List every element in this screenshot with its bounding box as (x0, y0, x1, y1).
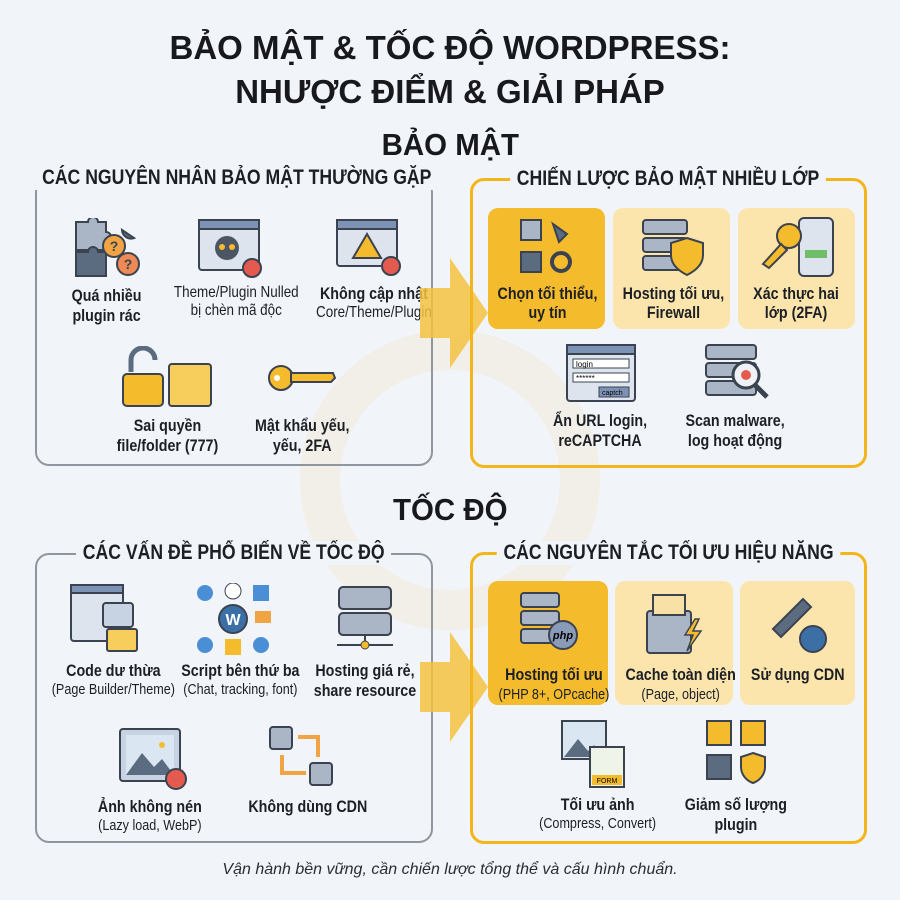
section heading: tốc độ: TỐC ĐỘ (393, 492, 507, 527)
item: nulled theme: Theme/Plugin Nulled (174, 284, 299, 301)
item: reduce plugins: Giảm số lượng (684, 795, 787, 814)
item: not updated (316, 219, 432, 321)
item: scan malware: log hoạt động (688, 431, 783, 450)
panel title: CHIẾN LƯỢC BẢO MẬT NHIỀU LỚP (517, 167, 820, 190)
tile: minimal plugins: Chọn tối thiểu, (498, 284, 597, 303)
tile: 2FA (738, 208, 855, 329)
tile: optimized hosting (488, 581, 608, 705)
arrow: security (420, 258, 488, 368)
item: weak password (255, 365, 349, 455)
item: hide login (553, 344, 648, 450)
tile: cache: (Page, object) (641, 686, 720, 703)
item: weak password: yếu, 2FA (273, 436, 331, 455)
item: hide login: Ẩn URL login, (553, 411, 648, 430)
item: image optimization: (Compress, Convert) (539, 815, 656, 832)
panel: security causes (35, 178, 433, 466)
item: no CDN (248, 726, 367, 816)
panel: security strategy (470, 178, 867, 468)
tile: optimized hosting: (PHP 8+, OPcache) (499, 686, 609, 703)
title (170, 29, 730, 110)
item: wrong permissions: Sai quyền (133, 416, 201, 435)
item: reduce plugins: plugin (714, 815, 757, 834)
item: hide login: login (576, 360, 592, 369)
item: hide login: reCAPTCHA (559, 431, 642, 450)
item: uncompressed image: Ảnh không nén (98, 797, 201, 816)
watermark (300, 330, 600, 630)
item: uncompressed image (98, 728, 201, 834)
item: not updated: Không cập nhật (320, 284, 428, 303)
item: redundant code: Code dư thừa (66, 661, 161, 680)
item: hide login: ****** (576, 374, 594, 383)
item: cheap hosting: share resource (314, 681, 416, 700)
tile: CDN (740, 581, 855, 705)
item: hide login: captch (602, 390, 622, 397)
item: third-party scripts: (Chat, tracking, font) (183, 681, 297, 698)
panel title: CÁC VẤN ĐỀ PHỔ BIẾN VỀ TỐC ĐỘ (83, 541, 385, 564)
item: weak password: Mật khẩu yếu, (255, 416, 349, 435)
item: redundant code: (Page Builder/Theme) (52, 681, 175, 698)
panel title: CÁC NGUYÊN TẮC TỐI ƯU HIỆU NĂNG (503, 541, 834, 564)
item: wrong permissions (116, 346, 218, 455)
item: too many plugins: plugin rác (73, 306, 141, 325)
tile: hosting firewall: Hosting tối ưu, (623, 284, 724, 303)
tile: minimal plugins: uy tín (528, 303, 567, 322)
tile: cache (615, 581, 733, 705)
footer text: Vận hành bền vững, cần chiến lược tổng thể và cấu hình chuẩn. (222, 861, 678, 878)
item: not updated: Core/Theme/Plugin (316, 304, 432, 321)
item: too many plugins: ? (110, 238, 118, 254)
item: third-party scripts: W (225, 612, 241, 629)
section heading: bảo mật: BẢO MẬT (381, 127, 519, 162)
panel: speed issues (35, 553, 433, 843)
item: nulled theme: bị chèn mã độc (191, 302, 282, 319)
title: NHƯỢC ĐIỂM & GIẢI PHÁP (235, 73, 665, 110)
item: cheap hosting: Hosting giá rẻ, (315, 661, 415, 680)
item: scan malware: Scan malware, (686, 411, 785, 430)
item: too many plugins: ? (124, 256, 132, 272)
item: too many plugins: Quá nhiều (72, 286, 142, 305)
item: image optimization: FORM (597, 778, 617, 785)
tile: hosting firewall: Firewall (647, 303, 700, 322)
tile: hosting firewall (613, 208, 730, 329)
tile: CDN: Sử dụng CDN (751, 665, 844, 684)
item: uncompressed image: (Lazy load, WebP) (98, 817, 201, 834)
title: BẢO MẬT & TỐC ĐỘ WORDPRESS: (170, 29, 730, 66)
item: redundant code (52, 584, 175, 698)
tile: optimized hosting: php (552, 630, 573, 642)
item: reduce plugins (684, 720, 787, 834)
tile: cache: Cache toàn diện (626, 665, 736, 684)
item: too many plugins (72, 218, 142, 325)
item: image optimization (539, 720, 656, 832)
tile: minimal plugins (488, 208, 605, 329)
item: wrong permissions: file/folder (777) (116, 436, 218, 455)
item: image optimization: Tối ưu ảnh (561, 795, 635, 814)
item: no CDN: Không dùng CDN (248, 797, 367, 816)
panel title: CÁC NGUYÊN NHÂN BẢO MẬT THƯỜNG GẶP (42, 166, 431, 189)
tile: 2FA: Xác thực hai (754, 284, 839, 303)
tile: optimized hosting: Hosting tối ưu (505, 665, 603, 684)
item: scan malware (686, 344, 785, 450)
item: nulled theme (174, 219, 299, 319)
item: cheap hosting (314, 586, 416, 700)
panel: performance principles (470, 552, 867, 844)
arrow: speed (420, 632, 488, 742)
tile: 2FA: lớp (2FA) (765, 303, 828, 322)
item: third-party scripts: Script bên thứ ba (181, 661, 300, 680)
item: third-party scripts (181, 583, 300, 698)
